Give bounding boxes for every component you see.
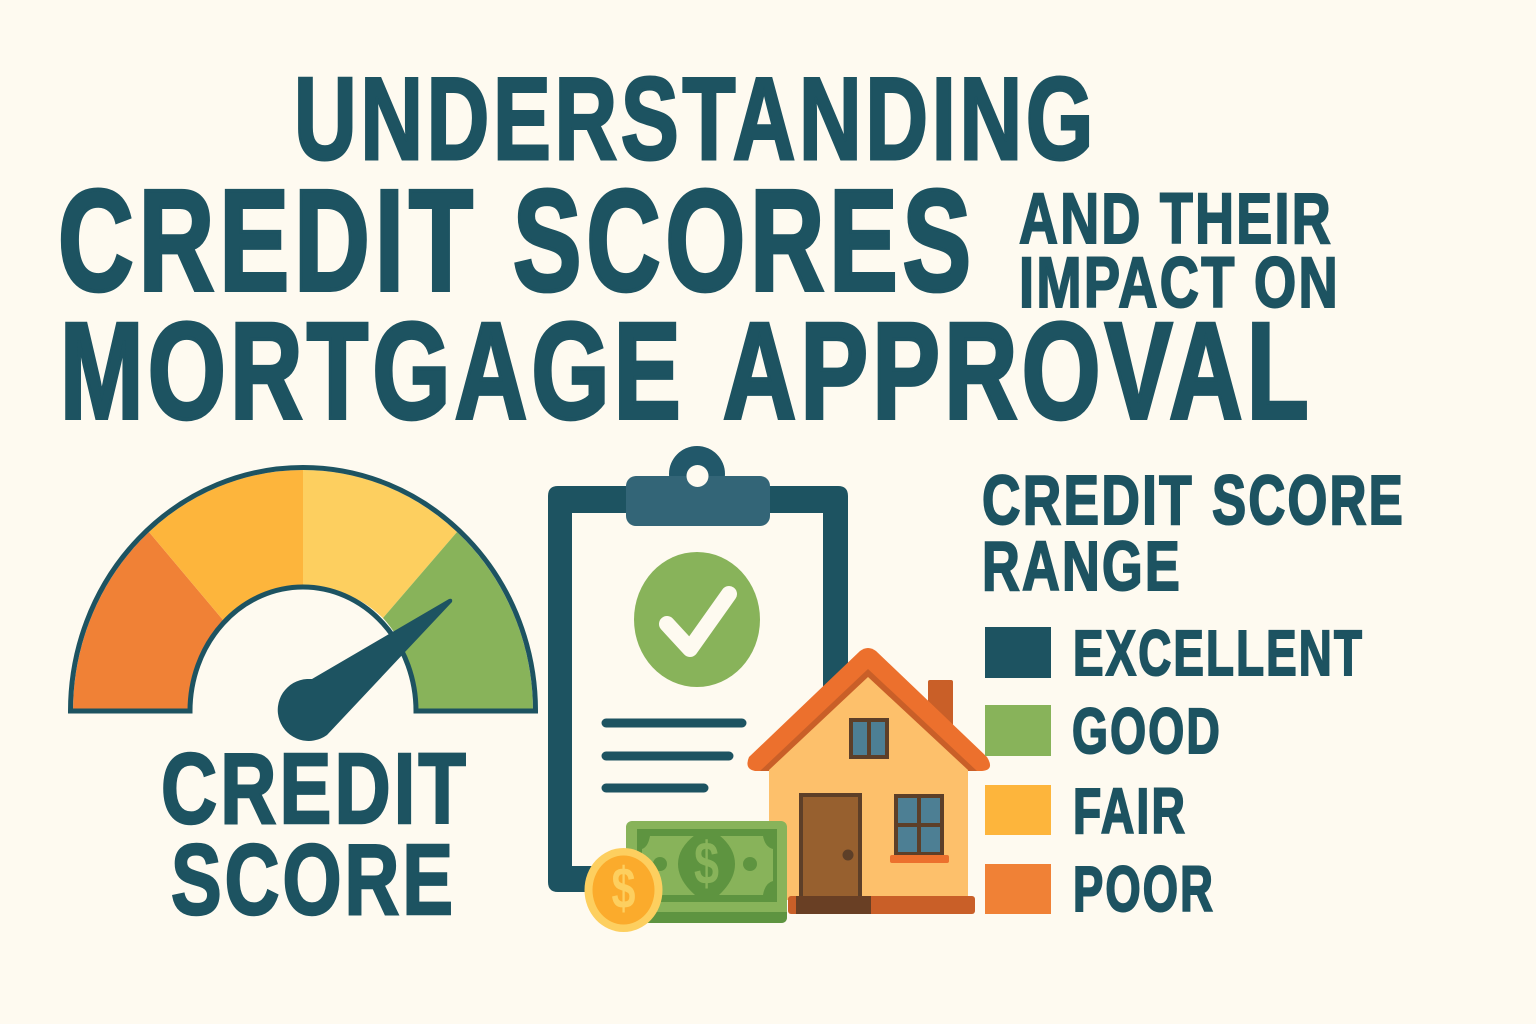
title: IMPACT ON: [1019, 244, 1340, 323]
gauge segment: average: [303, 470, 457, 618]
clipboard board: [548, 486, 848, 892]
upper window: [851, 720, 887, 757]
gauge label: [161, 733, 469, 936]
clipboard clip: [626, 446, 770, 526]
gauge label: CREDIT: [161, 733, 469, 845]
gauge segment: poor: [73, 532, 223, 711]
title: CREDIT: [58, 160, 478, 321]
door: [801, 795, 860, 898]
legend heading: CREDIT: [982, 461, 1194, 539]
title: [58, 53, 1340, 448]
approval check circle: [634, 552, 760, 687]
legend: fair: [985, 775, 1187, 847]
check mark: [667, 594, 729, 649]
lower window: [896, 796, 942, 854]
window sill: [890, 855, 949, 863]
gauge needle: [278, 599, 452, 741]
title: SCORES: [513, 160, 976, 321]
legend: good: GOOD: [1072, 695, 1222, 767]
icon: house: [747, 648, 990, 914]
legend: fair: FAIR: [1073, 775, 1187, 847]
title: AND THEIR: [1019, 180, 1333, 259]
roof shadow: [760, 669, 977, 771]
legend: excellent: [985, 617, 1364, 689]
icon: money bill: [626, 821, 787, 923]
title: MORTGAGE: [60, 295, 685, 448]
icon: clipboard: [548, 446, 848, 892]
legend: good: [985, 695, 1222, 767]
title: UNDERSTANDING: [294, 53, 1097, 184]
document lines: [606, 723, 742, 788]
coin dollar sign: $: [612, 856, 636, 921]
gauge: credit score meter: [70, 468, 536, 741]
gauge segment: good: [383, 532, 533, 711]
gauge segment: fair: [149, 470, 303, 620]
legend: poor: [985, 853, 1215, 925]
roof: [747, 648, 990, 771]
icon: coin: [584, 848, 662, 932]
gauge outline: [70, 468, 536, 711]
chimney: [928, 680, 953, 740]
bill dollar sign: $: [694, 830, 719, 897]
legend: poor: POOR: [1073, 853, 1215, 925]
legend heading: RANGE: [982, 527, 1182, 605]
house wall: [769, 677, 968, 900]
title: APPROVAL: [723, 295, 1313, 448]
legend: excellent: EXCELLENT: [1073, 617, 1364, 689]
house base: [788, 896, 975, 914]
legend heading: [982, 461, 1405, 605]
gauge label: SCORE: [171, 824, 456, 936]
legend heading: SCORE: [1212, 461, 1405, 539]
